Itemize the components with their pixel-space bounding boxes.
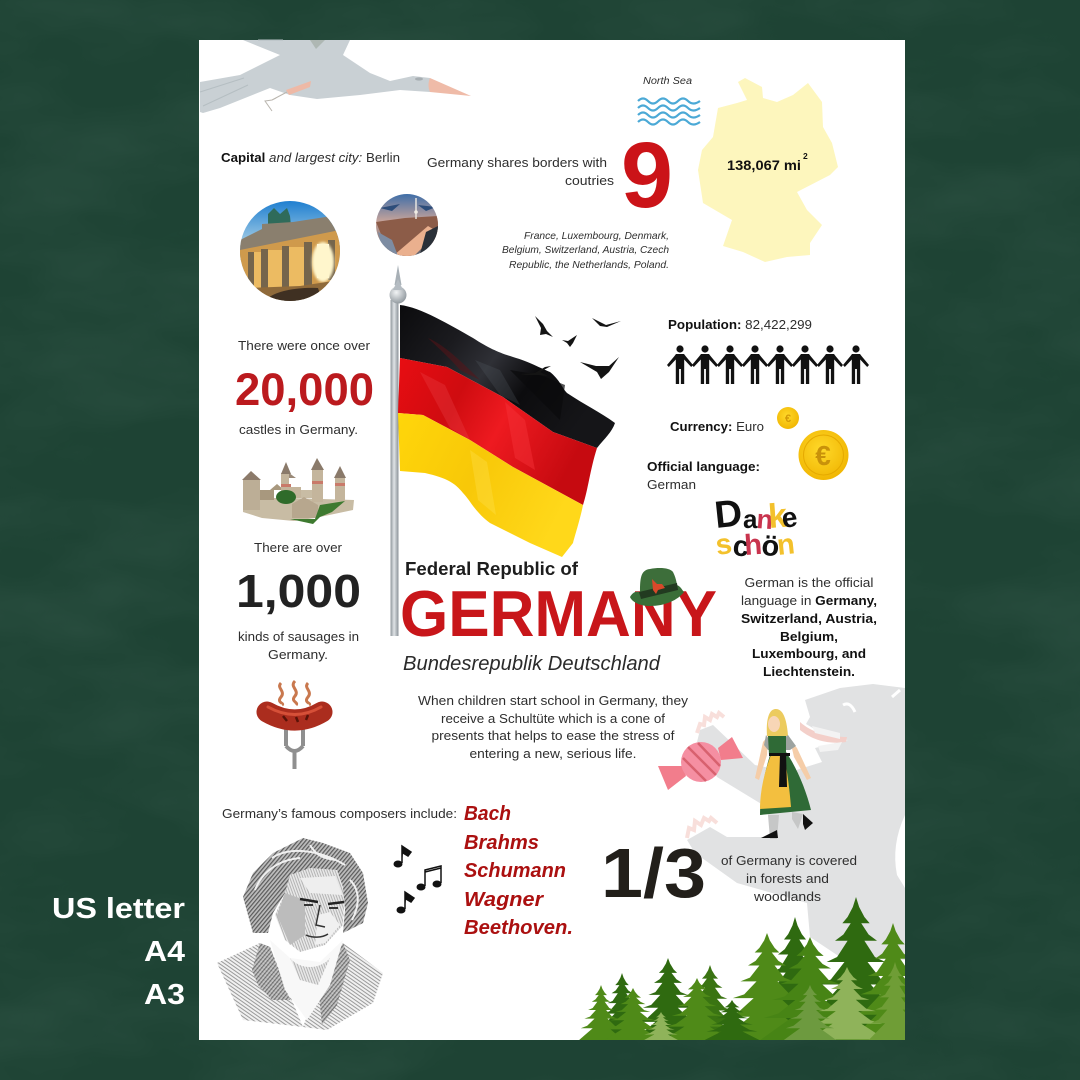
forest fact — [601, 834, 857, 912]
main title: GERMANY — [400, 577, 717, 650]
map area figure: 2 — [803, 151, 808, 161]
flag pole — [390, 265, 406, 636]
capital text: Capital and largest city: Berlin — [221, 150, 400, 165]
icon: Bavarian hat — [630, 568, 684, 606]
icon: row of people — [667, 345, 869, 384]
official language countries text: language in Germany, — [741, 593, 877, 608]
illustration: castle — [242, 458, 354, 524]
composers list: Wagner — [464, 889, 544, 911]
official language text — [647, 459, 760, 492]
German flag — [398, 305, 615, 557]
sausages fact: There are over — [254, 540, 343, 555]
official language countries text: Luxembourg, and — [752, 646, 866, 661]
Schultüte paragraph: When children start school in Germany, they — [418, 693, 689, 708]
lettering: Danke schön: Danke — [713, 492, 799, 537]
format labels: US letter — [52, 893, 185, 925]
icon: euro coins — [777, 407, 848, 480]
silhouette birds — [520, 316, 621, 379]
composers list: Brahms — [464, 832, 539, 854]
forest fact: 1/3 — [601, 834, 706, 912]
icon: euro coins: € — [785, 413, 791, 425]
icon: music notes — [394, 846, 442, 914]
illustration: grey bear watermark — [687, 684, 905, 960]
forest fact: in forests and — [746, 871, 829, 886]
list of neighbouring countries: Belgium, Switzerland, Austria, Czech — [502, 245, 669, 256]
official language countries text — [741, 575, 877, 679]
icon: candy — [658, 737, 743, 790]
illustration: Beethoven engraving — [217, 838, 383, 1030]
illustration: pine forest — [579, 897, 936, 1041]
lettering: Danke schön: schön — [714, 528, 796, 564]
format labels — [52, 893, 185, 1011]
forest fact: of Germany is covered — [721, 853, 857, 868]
north sea label: North Sea — [643, 76, 692, 87]
borders text: coutries — [565, 173, 615, 188]
population text: Population: 82,422,299 — [668, 317, 812, 332]
castles fact: There were once over — [238, 338, 371, 353]
castles fact: castles in Germany. — [239, 422, 358, 437]
lettering: Danke schön — [713, 492, 799, 564]
sausages fact: kinds of sausages in — [238, 629, 359, 644]
currency text: Currency: Euro — [670, 419, 764, 434]
map of Germany — [698, 78, 838, 262]
main title: Bundesrepublik Deutschland — [403, 653, 661, 675]
list of neighbouring countries: France, Luxembourg, Denmark, — [524, 231, 669, 242]
official language countries text: German is the official — [744, 575, 874, 590]
main title — [400, 559, 717, 675]
big number 9: 9 — [621, 123, 673, 227]
main title: Federal Republic of — [405, 559, 579, 579]
composers heading: Germany’s famous composers include: — [222, 806, 457, 821]
photo: Berlin skyline — [376, 194, 438, 258]
sausages fact — [236, 540, 361, 662]
sausages fact: 1,000 — [236, 565, 361, 617]
Schultüte paragraph: presents that helps to ease the stress of — [432, 728, 675, 743]
list of neighbouring countries — [502, 231, 669, 271]
composers list: Schumann — [464, 860, 566, 882]
official language text: German — [647, 477, 696, 492]
format labels: A4 — [144, 936, 185, 968]
Schultüte paragraph: receive a Schultüte which is a cone of — [441, 711, 665, 726]
official language text: Official language: — [647, 459, 760, 474]
forest fact: woodlands — [753, 889, 822, 904]
borders text: Germany shares borders with — [427, 155, 607, 170]
map area figure: 138,067 mi — [727, 158, 801, 173]
official language countries text: Liechtenstein. — [763, 664, 855, 679]
list of neighbouring countries: Republic, the Netherlands, Poland. — [509, 260, 669, 271]
icon: euro coins: € — [815, 440, 831, 471]
official language countries text: Switzerland, Austria, — [741, 611, 877, 626]
map area figure — [727, 151, 808, 173]
illustration: girl in dirndl — [755, 709, 813, 839]
format labels: A3 — [144, 979, 185, 1011]
composers list — [464, 803, 573, 939]
borders text — [427, 155, 615, 188]
illustration: stork in flight — [200, 40, 471, 113]
castles fact — [235, 338, 374, 437]
composers list: Bach — [464, 803, 511, 825]
poster sheet — [199, 40, 905, 1040]
official language countries text: Belgium, — [780, 629, 838, 644]
Schultüte paragraph: entering a new, serious life. — [470, 746, 636, 761]
composers list: Beethoven. — [464, 917, 573, 939]
castles fact: 20,000 — [235, 364, 374, 415]
icon: sausage on fork — [267, 681, 322, 769]
Schultüte paragraph — [418, 693, 689, 761]
icon: sea waves — [638, 98, 700, 124]
photo: Brandenburg Gate — [240, 201, 340, 301]
sausages fact: Germany. — [268, 647, 328, 662]
